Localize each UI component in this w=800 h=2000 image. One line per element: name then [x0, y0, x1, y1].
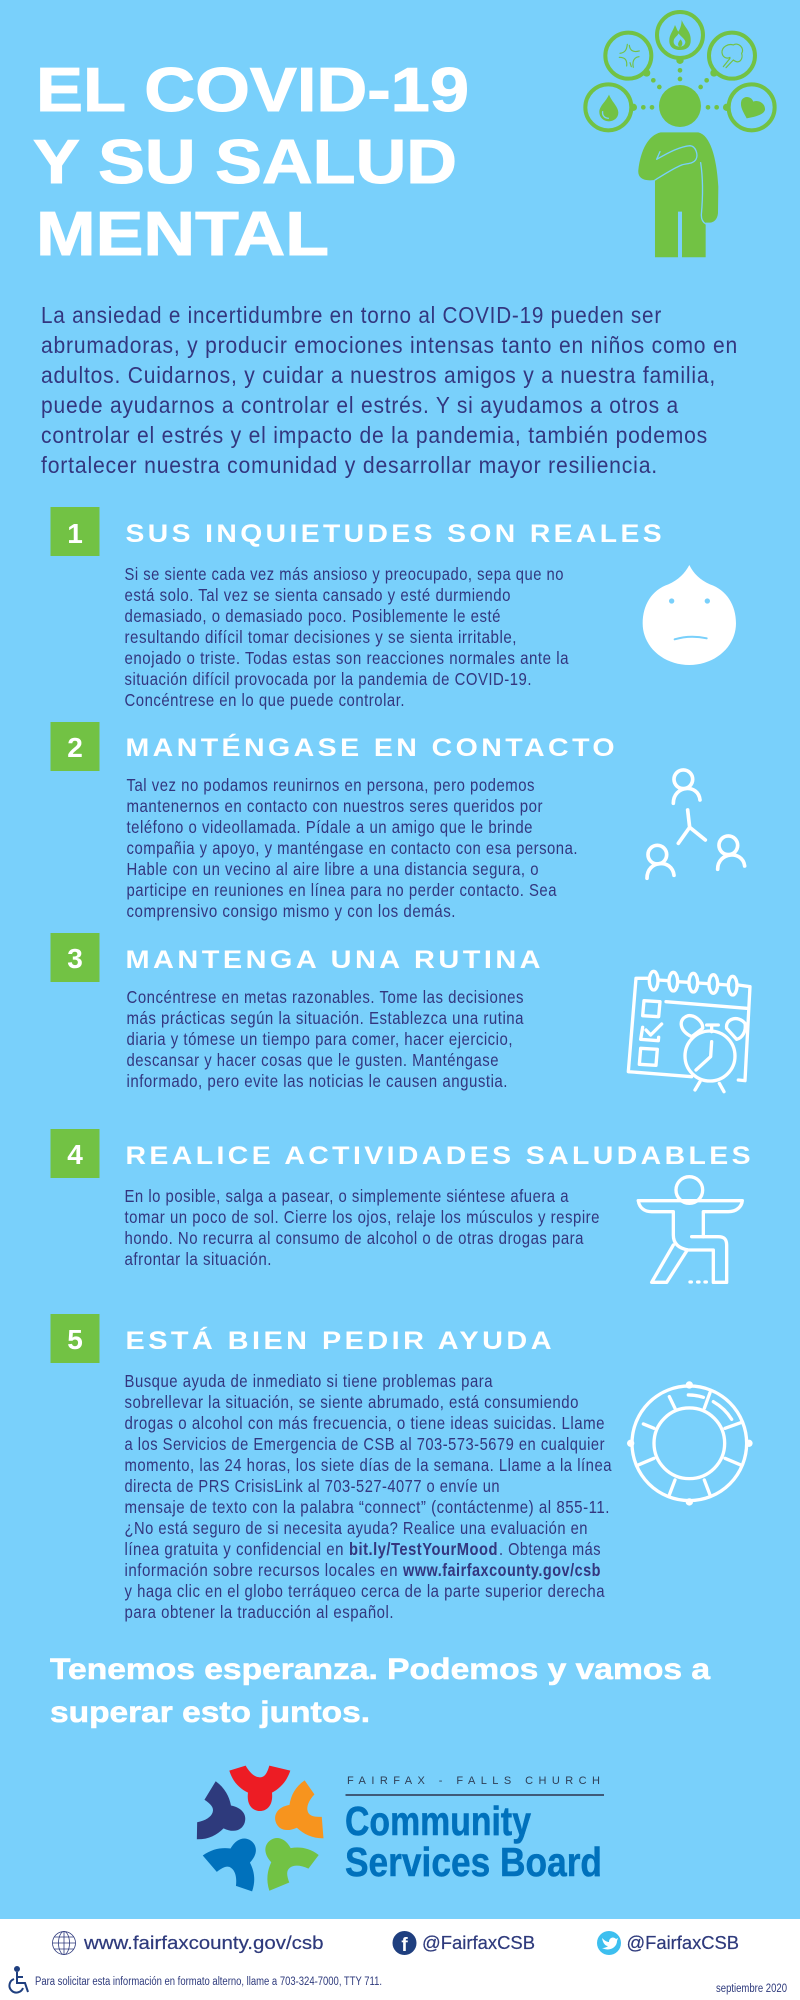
footer band [0, 1919, 800, 2000]
number badge 5 [50, 1314, 100, 1363]
intro paragraph: abrumadoras, y producir emociones intensas tanto en niños como en [41, 332, 738, 358]
number badge 2: 2 [67, 732, 83, 763]
heading 4: REALICE ACTIVIDADES SALUDABLES [126, 1142, 754, 1170]
title: EL COVID-19 [36, 56, 469, 125]
text block 3: descansar y hacer cosas que le gusten. Manténgase [126, 1050, 499, 1070]
title [33, 56, 469, 269]
accessibility note: Para solicitar esta información en formato alterno, llame a 703-324-7000, TTY 711. [35, 1976, 382, 1988]
icon: yoga pose [638, 1177, 742, 1282]
panel: section 2 [50, 722, 745, 921]
number badge 5: 5 [67, 1324, 83, 1355]
heading 1: SUS INQUIETUDES SON REALES [126, 520, 665, 548]
text block 3: informado, pero evite las noticias le causen angustia. [126, 1071, 508, 1091]
twitter handle: @FairfaxCSB [626, 1933, 739, 1953]
icon: globe [52, 1932, 76, 1954]
text block 2: comprensivo consigo mismo y con los demás. [126, 901, 456, 921]
number badge 2 [50, 722, 100, 771]
logo: Community Services Board: Services Board [345, 1839, 602, 1885]
logo: Community Services Board: FAIRFAX - FALLS CHURCH [347, 1775, 600, 1787]
text block 1: demasiado, o demasiado poco. Posiblemente le esté [124, 606, 501, 626]
website: www.fairfaxcounty.gov/csb [83, 1933, 323, 1953]
text block 4 [124, 1186, 600, 1269]
text block 5: directa de PRS CrisisLink al 703-527-4077 o envíe un [124, 1476, 500, 1496]
text block 1 [124, 564, 569, 710]
icon: life preserver [627, 1381, 753, 1506]
text block 1: situación difícil provocada por la pandemia de COVID-19. [124, 669, 532, 689]
text block 4: hondo. No recurra al consumo de alcohol o de otras drogas para [124, 1228, 584, 1248]
facebook handle: @FairfaxCSB [422, 1933, 535, 1953]
number badge 4: 4 [67, 1139, 83, 1170]
text block 1: enojado o triste. Todas estas son reacciones normales ante la [124, 648, 569, 668]
text block 2: teléfono o videollamada. Pídale a un amigo que le brinde [126, 817, 533, 837]
text block 2: Hable con un vecino al aire libre a una distancia segura, o [126, 859, 539, 879]
text block 5: para obtener la traducción al español. [124, 1602, 394, 1622]
logo: Community Services Board: Community [345, 1798, 531, 1844]
icon: sad drop face [643, 565, 736, 665]
title: Y SU SALUD [33, 128, 457, 197]
text block 5: información sobre recursos locales en [124, 1560, 398, 1580]
panel: section 5 [50, 1314, 753, 1622]
panel: section 3 [50, 933, 750, 1092]
text block 5: y haga clic en el globo terráqueo cerca de la parte superior derecha [124, 1581, 605, 1601]
number badge 3 [50, 933, 100, 982]
text block 3: Concéntrese en metas razonables. Tome las decisiones [126, 987, 524, 1007]
text block 3: diaria y tómese un tiempo para comer, hacer ejercicio, [126, 1029, 513, 1049]
date: septiembre 2020 [716, 1983, 787, 1995]
panel: section 4 [50, 1129, 754, 1282]
intro paragraph: adultos. Cuidarnos, y cuidar a nuestros amigos y a nuestra familia, [41, 362, 716, 388]
text block 5: a los Servicios de Emergencia de CSB al 703-573-5679 en cualquier [124, 1434, 605, 1454]
title: MENTAL [36, 200, 329, 269]
number badge 1: 1 [67, 518, 83, 549]
intro paragraph: fortalecer nuestra comunidad y desarrollar mayor resiliencia. [41, 452, 658, 478]
heading 2: MANTÉNGASE EN CONTACTO [126, 733, 618, 762]
closing message: superar esto juntos. [50, 1696, 370, 1729]
heading 5: ESTÁ BIEN PEDIR AYUDA [126, 1326, 555, 1355]
text block 5: momento, las 24 horas, los siete días de la semana. Llame a la línea [124, 1455, 612, 1475]
icon: twitter [597, 1931, 621, 1955]
text block 4: En lo posible, salga a pasear, o simplemente siéntese afuera a [124, 1186, 569, 1206]
text block 2: Tal vez no podamos reunirnos en persona, pero podemos [126, 775, 535, 795]
text block 5: Busque ayuda de inmediato si tiene problemas para [124, 1371, 493, 1391]
text block 2: mantenernos en contacto con nuestros seres queridos por [126, 796, 543, 816]
text block 5: sobrellevar la situación, se siente abrumado, está consumiendo [124, 1392, 579, 1412]
text block 5: ¿No está seguro de si necesita ayuda? Realice una evaluación en [124, 1518, 588, 1538]
panel: section 1 [50, 507, 736, 710]
text block 5: línea gratuita y confidencial en [124, 1539, 344, 1559]
text block 2: compañia y apoyo, y manténgase en contacto con esa persona. [126, 838, 578, 858]
text block 2 [126, 775, 578, 921]
text block 4: afrontar la situación. [124, 1249, 272, 1269]
intro paragraph: puede ayudarnos a controlar el estrés. Y si ayudamos a otros a [41, 392, 679, 418]
closing message: Tenemos esperanza. Podemos y vamos a [50, 1653, 710, 1686]
logo: Community Services Board [192, 1766, 604, 1895]
text block 2: participe en reuniones en línea para no perder contacto. Sea [126, 880, 557, 900]
icon: facebook: f [401, 1935, 408, 1956]
closing message [50, 1653, 710, 1729]
text block 5: . Obtenga más [499, 1539, 601, 1559]
icon: wheelchair [9, 1967, 28, 1993]
icon: connected people [647, 770, 745, 878]
icon: calendar and alarm clock [628, 971, 750, 1092]
text block 5: drogas o alcohol con más frecuencia, o tiene ideas suicidas. Llame [124, 1413, 605, 1433]
text block 3 [126, 987, 524, 1091]
text block 5: www.fairfaxcounty.gov/csb [402, 1560, 601, 1580]
icon: five-colour logo mark [192, 1766, 328, 1895]
heading 3: MANTENGA UNA RUTINA [126, 946, 544, 974]
text block 3: más prácticas según la situación. Establezca una rutina [126, 1008, 524, 1028]
number badge 4 [50, 1129, 100, 1178]
number badge 1 [50, 507, 100, 556]
number badge 3: 3 [67, 943, 83, 974]
text block 5: bit.ly/TestYourMood [349, 1539, 498, 1559]
text block 5 [124, 1371, 612, 1622]
text block 1: Si se siente cada vez más ansioso y preocupado, sepa que no [124, 564, 564, 584]
text block 4: tomar un poco de sol. Cierre los ojos, relaje los músculos y respire [124, 1207, 600, 1227]
text block 5: mensaje de texto con la palabra “connect” (contáctenme) al 855-11. [124, 1497, 610, 1517]
icon: person with emotion bubbles [585, 12, 775, 257]
icon: facebook [392, 1931, 416, 1956]
text block 1: está solo. Tal vez se sienta cansado y esté durmiendo [124, 585, 511, 605]
intro paragraph: controlar el estrés y el impacto de la pandemia, también podemos [41, 422, 708, 448]
intro paragraph [41, 302, 738, 478]
text block 1: resultando difícil tomar decisiones y se sienta irritable, [124, 627, 517, 647]
text block 1: Concéntrese en lo que puede controlar. [124, 690, 405, 710]
intro paragraph: La ansiedad e incertidumbre en torno al COVID-19 pueden ser [41, 302, 662, 328]
